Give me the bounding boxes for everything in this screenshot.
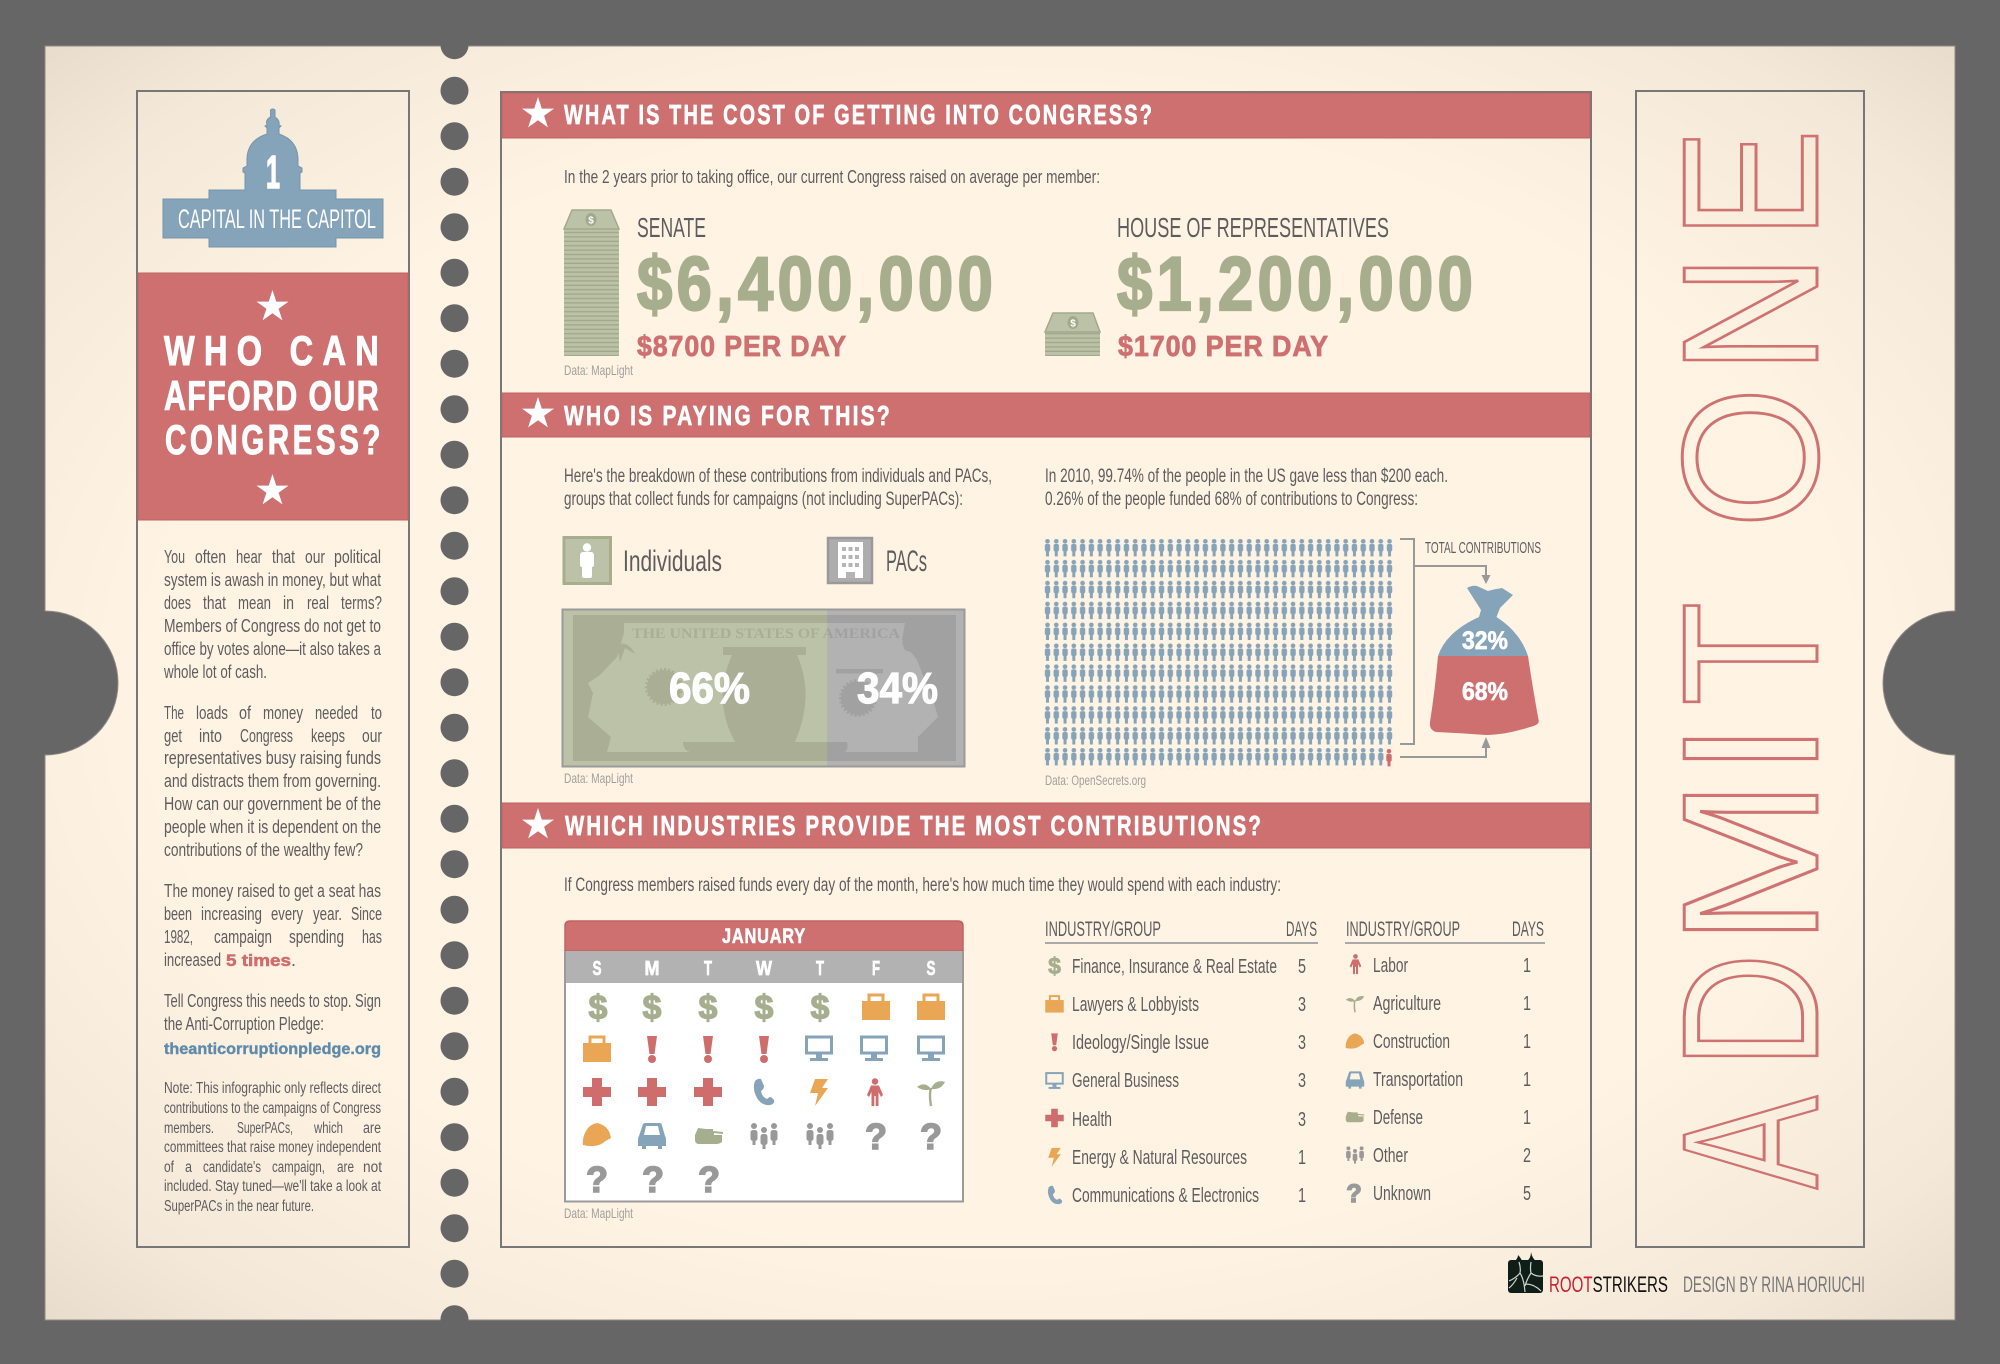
calendar week 1: $ — [811, 989, 830, 1027]
heading: admit one: A — [1642, 1096, 1858, 1189]
row: unknown: ? — [1346, 1180, 1362, 1208]
text: intro paragraph: real — [307, 593, 329, 613]
row: finance: 5 — [1298, 956, 1306, 978]
source: Data: OpenSecrets.org — [1045, 772, 1146, 788]
text: note: members. — [164, 1120, 214, 1137]
text: third paragraph: . — [291, 950, 296, 970]
calendar weekday row: T — [704, 958, 712, 980]
text: note: included. Stay tuned—we'll take a look at — [164, 1178, 382, 1195]
row: agriculture: 1 — [1523, 993, 1531, 1015]
text: third paragraph: 1982, — [164, 927, 193, 947]
calendar week 2 — [583, 1036, 944, 1063]
icon: short money stack: $ — [1070, 318, 1076, 330]
row: transportation: 1 — [1523, 1069, 1531, 1091]
text: intro paragraph: Members of Congress do not get to — [164, 616, 381, 636]
calendar week 1: $ — [589, 989, 608, 1027]
source: Data: MapLight — [564, 770, 633, 786]
row: unknown: Unknown — [1373, 1183, 1431, 1205]
text: third paragraph: increased — [164, 950, 221, 970]
text: intro paragraph: our — [305, 547, 325, 567]
text: second paragraph: to — [371, 703, 382, 723]
text: third paragraph — [164, 881, 382, 970]
text: third paragraph: increasing — [201, 904, 262, 924]
row: energy: 1 — [1298, 1147, 1306, 1169]
row: general business: General Business — [1072, 1070, 1179, 1092]
heading: admit one: D — [1642, 953, 1858, 1069]
panel: admit one — [1636, 91, 1864, 1247]
row: construction — [1346, 1031, 1531, 1053]
section heading: paying — [502, 393, 1590, 437]
table: industries column two — [1345, 918, 1545, 1208]
text: third paragraph: campaign — [214, 927, 272, 947]
text: intro paragraph: political — [334, 547, 381, 567]
text: intro paragraph: You — [164, 547, 185, 567]
title banner — [138, 273, 408, 520]
text: call to action: Tell Congress this needs to stop. Sign — [164, 991, 381, 1011]
row: labor — [1350, 954, 1531, 977]
stat: senate: $6,400,000 — [637, 242, 997, 327]
calendar weekday row: S — [592, 958, 602, 980]
stat: senate: $8700 PER DAY — [637, 331, 847, 363]
heading: admit one: M — [1642, 779, 1858, 946]
text: note: are — [337, 1159, 354, 1176]
row: construction: Construction — [1373, 1031, 1450, 1053]
text: breakdown intro: groups that collect funds for campaigns (not including SuperPACs): — [564, 489, 963, 510]
source: Data: MapLight — [564, 1205, 633, 1221]
chart: calendar: JANUARY — [722, 925, 806, 948]
text: note: SuperPACs in the near future. — [164, 1198, 314, 1215]
calendar week 5: ? — [698, 1159, 720, 1200]
row: other — [1346, 1145, 1531, 1167]
row: unknown — [1346, 1180, 1531, 1208]
row: construction: 1 — [1523, 1031, 1531, 1053]
section heading: industries: WHICH INDUSTRIES PROVIDE THE MOST CONTRIBUTIONS? — [565, 810, 1263, 841]
text: note: contributions to the campaigns of Congress — [164, 1100, 381, 1117]
table: industries column one: DAYS — [1286, 918, 1317, 941]
icon: tall money stack — [564, 210, 619, 356]
stat: house — [1117, 212, 1477, 363]
text: third paragraph: been — [164, 904, 192, 924]
text: intro paragraph: in — [283, 593, 294, 613]
text: second paragraph: people when it is dependent on the — [164, 817, 381, 837]
row: health: Health — [1072, 1109, 1112, 1131]
legend: PACs: PACs — [886, 545, 927, 578]
calendar week 1: $ — [699, 989, 718, 1027]
text: call to action: the Anti-Corruption Pledge: — [164, 1014, 324, 1034]
text: intro paragraph: terms? — [341, 593, 382, 613]
text: second paragraph: money — [263, 703, 303, 723]
text: second paragraph: into — [199, 726, 222, 746]
row: labor: Labor — [1373, 955, 1408, 977]
text: intro paragraph: office by votes alone—it also takes a — [164, 639, 382, 659]
footer credits — [1508, 1252, 1865, 1297]
calendar weekday row: T — [816, 958, 824, 980]
text: breakdown intro: Here's the breakdown of these contributions from individuals and PACs, — [564, 466, 992, 487]
text: third paragraph: has — [362, 927, 382, 947]
text: third paragraph: 5 times — [226, 951, 291, 970]
calendar week 4: ? — [920, 1116, 942, 1157]
stat: house: $1700 PER DAY — [1118, 331, 1329, 363]
text: intro paragraph: hear — [236, 547, 262, 567]
calendar week 4 — [583, 1116, 942, 1157]
chart: money bag: 68% — [1462, 678, 1508, 706]
text: note: are — [363, 1120, 381, 1137]
section heading: industries — [502, 803, 1590, 848]
chart: dollar bill split: THE UNITED STATES OF AMERICA — [632, 626, 900, 642]
text: second paragraph: get — [164, 726, 182, 746]
row: health: 3 — [1298, 1109, 1306, 1131]
icon: capitol logo: 1 — [266, 146, 280, 198]
text: second paragraph: Congress — [240, 726, 293, 746]
text: second paragraph: our — [362, 726, 382, 746]
text: second paragraph: needed — [315, 703, 358, 723]
text: breakdown intro — [564, 466, 992, 510]
text: third paragraph: spending — [289, 927, 344, 947]
legend: individuals — [564, 538, 722, 584]
calendar weekday row: W — [756, 958, 772, 980]
row: communications: Communications & Electronics — [1072, 1185, 1259, 1207]
icon: rootstrikers logo — [1508, 1252, 1543, 1293]
row: defense — [1346, 1107, 1531, 1129]
text: intro paragraph: that — [203, 593, 226, 613]
calendar week 5: ? — [642, 1159, 664, 1200]
row: ideology: 3 — [1298, 1032, 1306, 1054]
calendar week 5: ? — [586, 1159, 608, 1200]
text: third paragraph: The money raised to get a seat has — [164, 881, 381, 901]
calendar week 1: $ — [643, 989, 662, 1027]
table: industries column one: INDUSTRY/GROUP — [1045, 918, 1161, 941]
text: cost intro: In the 2 years prior to taking office, our current Congress raised on average per member: — [564, 167, 1100, 187]
calendar week 3 — [583, 1078, 945, 1106]
icon: short money stack — [1045, 313, 1100, 356]
text: note: SuperPACs, — [237, 1120, 293, 1137]
chart: dollar bill split: 34% — [857, 664, 938, 713]
calendar weekday row: S — [926, 958, 936, 980]
text: intro paragraph: that — [272, 547, 295, 567]
row: general business: 3 — [1298, 1070, 1306, 1092]
row: lawyers: Lawyers & Lobbyists — [1072, 994, 1199, 1016]
icon: capitol logo — [163, 109, 383, 247]
chart: dollar bill split: 66% — [669, 664, 750, 713]
text: note: candidate's — [203, 1159, 261, 1176]
text: third paragraph: year. — [313, 904, 342, 924]
section heading: paying: WHO IS PAYING FOR THIS? — [564, 400, 892, 431]
text: call to action — [164, 991, 381, 1058]
row: unknown: 5 — [1523, 1183, 1531, 1205]
row: transportation — [1346, 1069, 1531, 1091]
text: note: a — [185, 1159, 192, 1176]
row: health — [1045, 1109, 1306, 1131]
source: Data: MapLight — [564, 362, 633, 378]
row: finance: $ — [1048, 953, 1061, 979]
text: second paragraph: representatives busy raising funds — [164, 748, 381, 768]
chart: dollar bill split — [562, 609, 965, 767]
text: second paragraph: of — [239, 703, 252, 723]
calendar weekday row: F — [872, 958, 880, 980]
text: donors intro: In 2010, 99.74% of the people in the US gave less than $200 each. — [1045, 466, 1448, 487]
text: note — [164, 1080, 383, 1215]
text: second paragraph: loads — [196, 703, 228, 723]
legend: PACs — [828, 538, 927, 583]
title banner: WHO CAN — [164, 327, 388, 374]
heading: admit one — [1642, 129, 1858, 1189]
panel: main — [501, 92, 1591, 1247]
row: defense: Defense — [1373, 1107, 1423, 1129]
calendar weekday row: M — [644, 958, 660, 980]
designer credit: DESIGN BY RINA HORIUCHI — [1683, 1272, 1865, 1297]
row: other: Other — [1373, 1145, 1408, 1167]
text: intro paragraph: mean — [238, 593, 271, 613]
row: agriculture: Agriculture — [1373, 993, 1441, 1015]
row: transportation: Transportation — [1373, 1069, 1463, 1091]
row: lawyers: 3 — [1298, 994, 1306, 1016]
row: ideology: Ideology/Single Issue — [1072, 1032, 1209, 1054]
stat: house: HOUSE OF REPRESENTATIVES — [1117, 212, 1389, 243]
text: third paragraph: every — [271, 904, 303, 924]
text: intro paragraph: system is awash in money, but what — [164, 570, 381, 590]
row: defense: 1 — [1523, 1107, 1531, 1129]
text: second paragraph: contributions of the wealthy few? — [164, 840, 363, 860]
text: second paragraph: The — [164, 703, 184, 723]
text: second paragraph: and distracts them from governing. — [164, 771, 381, 791]
text: note: which — [313, 1120, 343, 1137]
row: energy: Energy & Natural Resources — [1072, 1147, 1247, 1169]
calendar week 5 — [586, 1159, 720, 1200]
text: note: not — [363, 1159, 383, 1176]
row: communications: 1 — [1298, 1185, 1306, 1207]
text: note: of — [164, 1159, 175, 1176]
text: industries intro: If Congress members raised funds every day of the month, here's how much time they would spend with each industry: — [564, 875, 1281, 896]
row: labor: 1 — [1523, 955, 1531, 977]
heading: admit one: E — [1642, 129, 1858, 239]
arrows: brackets to money bag — [1400, 539, 1541, 757]
text: intro paragraph: whole lot of cash. — [163, 662, 267, 682]
heading: admit one: T — [1642, 602, 1858, 706]
heading: admit one: I — [1642, 721, 1858, 778]
heading: admit one: N — [1642, 254, 1858, 374]
stat: senate — [637, 212, 997, 363]
row: general business — [1046, 1070, 1306, 1092]
calendar week 1 — [589, 989, 945, 1027]
text: second paragraph: How can our government be of the — [164, 794, 381, 814]
heading: admit one: O — [1642, 387, 1858, 529]
title banner: CONGRESS? — [165, 416, 384, 463]
table: industries column two: INDUSTRY/GROUP — [1346, 918, 1460, 941]
legend: individuals: Individuals — [623, 545, 722, 578]
text: intro paragraph: often — [195, 547, 226, 567]
section heading: cost: WHAT IS THE COST OF GETTING INTO CONGRESS? — [564, 99, 1154, 130]
chart: money bag: 32% — [1462, 627, 1508, 655]
row: agriculture — [1346, 993, 1531, 1015]
text: second paragraph — [164, 703, 382, 860]
icon: capitol logo: CAPITAL IN THE CAPITOL — [178, 204, 376, 234]
panel: left sidebar — [137, 91, 409, 1247]
row: finance — [1048, 953, 1306, 979]
text: donors intro: 0.26% of the people funded 68% of contributions to Congress: — [1045, 489, 1418, 510]
table: industries column two: DAYS — [1512, 918, 1544, 941]
arrows: brackets to money bag: TOTAL CONTRIBUTIONS — [1425, 540, 1541, 557]
text: call to action: theanticorruptionpledge.org — [164, 1041, 381, 1058]
brand: ROOTSTRIKERS — [1549, 1272, 1668, 1297]
stat: house: $1,200,000 — [1117, 242, 1477, 327]
chart: money bag — [1430, 586, 1539, 735]
text: donors intro — [1045, 466, 1448, 510]
text: intro paragraph — [163, 547, 382, 682]
text: note: Note: This infographic only reflects direct — [164, 1080, 382, 1097]
chart: people grid — [1045, 539, 1395, 769]
text: note: committees that raise money independent — [164, 1139, 382, 1156]
text: note: campaign, — [272, 1159, 325, 1176]
row: other: 2 — [1523, 1145, 1531, 1167]
text: second paragraph: keeps — [311, 726, 345, 746]
chart: calendar — [565, 921, 963, 1202]
text: intro paragraph: does — [164, 593, 191, 613]
section heading: cost — [502, 93, 1590, 138]
icon: tall money stack: $ — [588, 216, 594, 226]
table: industries column one — [1045, 918, 1318, 1207]
row: finance: Finance, Insurance & Real Estate — [1072, 956, 1277, 978]
calendar week 4: ? — [865, 1116, 887, 1157]
title banner: AFFORD OUR — [164, 372, 380, 419]
chart: dollar bill split: THE UNITED STATES OF AMERICA — [632, 626, 900, 642]
stat: senate: SENATE — [637, 212, 706, 243]
text: third paragraph: Since — [351, 904, 382, 924]
calendar weekday row — [592, 958, 936, 980]
calendar week 1: $ — [755, 989, 774, 1027]
